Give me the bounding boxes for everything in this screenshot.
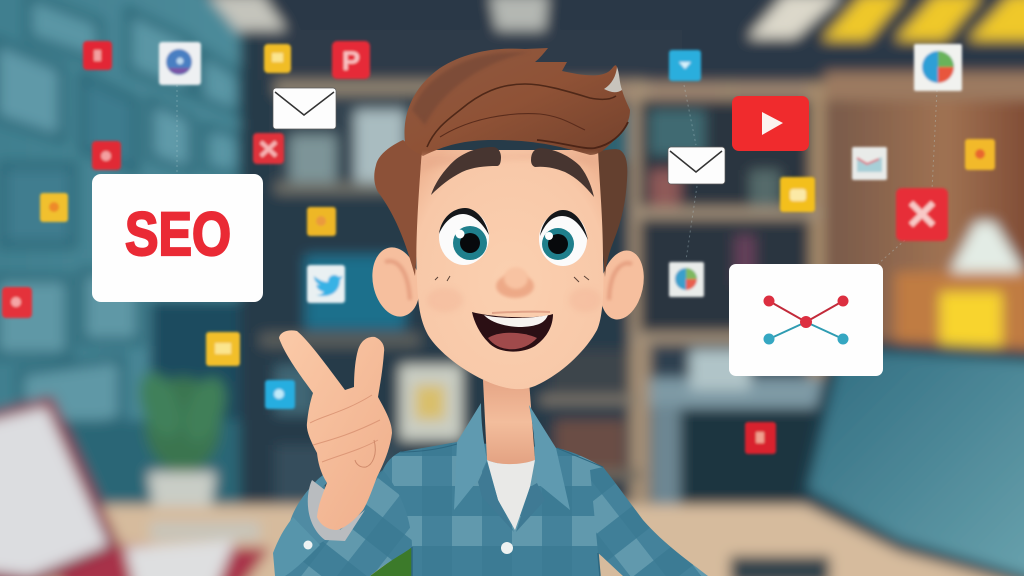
icon: red tag top-left (83, 41, 112, 70)
icon: yellow tile left (40, 193, 68, 222)
icon: yellow mail right (780, 177, 815, 212)
SEO label: SEO (125, 200, 231, 268)
freckles (435, 276, 589, 282)
face (416, 150, 603, 389)
nose (496, 267, 534, 298)
shirt torso and arms (274, 442, 708, 576)
icon: chrome-style badge (159, 42, 201, 85)
side hair left (374, 140, 424, 276)
icon: colorful pie small (669, 262, 704, 297)
icon: red pinterest (332, 41, 370, 79)
right brown wall (825, 100, 1024, 350)
left eye (439, 208, 489, 265)
white undershirt (487, 460, 535, 530)
ceiling lights (190, 0, 1024, 40)
icon: blue tile lower-left (265, 380, 295, 409)
icon: blue tile top (669, 50, 701, 81)
floating icons (2, 41, 995, 454)
green plant peeking under arm (370, 545, 412, 576)
SEO card (92, 174, 263, 302)
icon: yellow tile middle (307, 207, 336, 236)
icon: red small (92, 141, 121, 170)
cuff (273, 475, 365, 576)
icon: envelope chart tile (852, 147, 887, 180)
icon: red pinterest: P (342, 46, 360, 76)
mouth (472, 312, 553, 352)
icon: envelope right (668, 147, 725, 184)
icon: yellow mail small (264, 44, 291, 73)
icon: video play button (732, 96, 809, 151)
laptop (0, 396, 270, 576)
hair top (404, 48, 630, 156)
cabinet (650, 378, 835, 408)
right eyebrow (531, 148, 594, 197)
icon: red cross large (896, 188, 948, 241)
icon: red cross (253, 133, 284, 164)
ceiling (0, 0, 1024, 80)
monitor (730, 338, 1024, 576)
network diagram card (729, 264, 883, 376)
centre dark shelf (240, 30, 640, 510)
left ear (366, 243, 426, 321)
shirt collar (454, 403, 570, 532)
lamp (895, 222, 1024, 352)
icon: pie chart tile (914, 44, 962, 91)
dotted connector lines (177, 85, 937, 264)
icon: envelope left (273, 88, 336, 129)
wooden bookcase (530, 82, 1024, 102)
wall frames (0, 0, 240, 440)
face shading (417, 155, 601, 312)
icon: yellow tile right (965, 139, 995, 170)
left eyebrow (431, 147, 501, 195)
side hair right (597, 149, 627, 277)
character (273, 48, 708, 576)
shirt button (501, 542, 513, 554)
right eye (539, 210, 588, 266)
icon: red tile lower-right (745, 422, 776, 454)
icon: yellow mail tile (206, 332, 240, 366)
icon: red tile left edge (2, 287, 32, 318)
neck (483, 380, 535, 464)
desk (0, 505, 1024, 576)
hand with pointing finger (279, 330, 392, 530)
plant (131, 367, 234, 506)
right ear (594, 246, 650, 324)
icon: twitter bird tile (307, 265, 345, 303)
left teal wall (0, 0, 272, 510)
network nodes and links (764, 296, 848, 344)
